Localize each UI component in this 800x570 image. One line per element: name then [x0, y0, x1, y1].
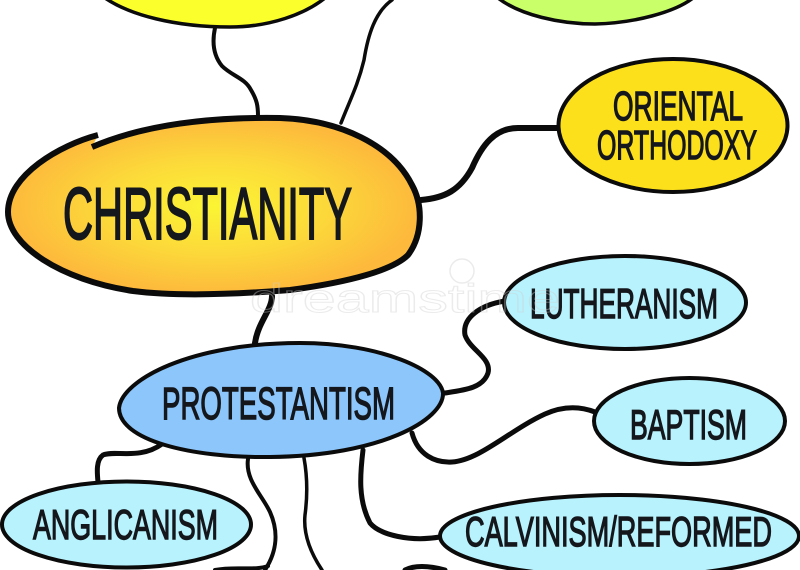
- node: Anglicanism: [2, 482, 251, 568]
- node: Baptism: [594, 378, 785, 464]
- node: Lutheranism: [504, 256, 746, 349]
- node: top green: [498, 0, 693, 24]
- node: Christianity: [8, 118, 420, 294]
- label: Protestantism: PROTESTANTISM: [162, 378, 395, 429]
- node: Oriental Orthodoxy: [558, 59, 788, 192]
- connectors: [97, 0, 595, 570]
- watermark: [250, 259, 560, 321]
- node: Calvinism/Reformed: [440, 495, 799, 570]
- watermark: dreamstime: [250, 277, 560, 321]
- node: top yellow: [105, 0, 325, 27]
- label: Anglicanism: ANGLICANISM: [33, 501, 218, 548]
- label: Christianity: CHRISTIANITY: [63, 174, 352, 255]
- node: Protestantism: [119, 343, 443, 457]
